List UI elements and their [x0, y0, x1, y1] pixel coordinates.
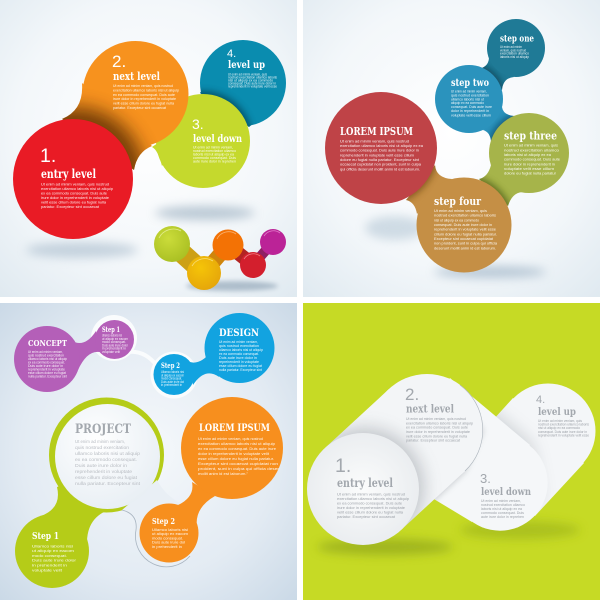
bubble 3: level down: level down — [193, 133, 242, 145]
capsule 1: entry level — [307, 433, 419, 545]
capsule 2: next level: irure dolor in reprehenderit in voluptate — [406, 430, 470, 434]
bubble: lorem ipsum orange and step 2: proident, sunt in culpa qui officia deser — [198, 467, 280, 471]
bubble: lorem ipsum orange and step 2: Step 2 — [152, 516, 175, 526]
bubble 1: entry level: Ut enim ad minim veniam, quis nostrud — [41, 182, 109, 186]
bubble: lorem ipsum red: LOREM IPSUM — [340, 124, 413, 138]
capsule 1: entry level: irure dolor in reprehenderit in voluptate — [337, 506, 405, 510]
bubble: project step 1 green: in prehenderit in — [32, 564, 67, 568]
bubble: design step 2: in prehenderit in — [161, 383, 182, 387]
bubble: lorem ipsum orange and step 2: Duis aute irure dol — [152, 541, 185, 545]
bubble: project step 1 green: Duis aute irure dolor — [32, 559, 77, 563]
bubble: concept step 1: Step 1 — [102, 325, 120, 334]
bubble 2: next level: exercitation ullamco laboris nisi ut aliquip — [113, 88, 179, 92]
bubble: step four — [406, 165, 512, 272]
bubble: step four: Ut enim ad minim veniam, quis — [434, 209, 487, 213]
bubble 2: next level: Ut enim ad minim veniam, quis nostrud — [113, 84, 173, 88]
capsule 3: level down: level down — [481, 486, 531, 498]
bubble: lorem ipsum red: dolore eu fugiat nulla pariatur. Excepteur sint — [340, 158, 419, 162]
capsule 4: level up — [496, 384, 596, 516]
bubble 3: level down: nostrud exercitation ullamco — [193, 149, 236, 153]
white ribbon between step 1 and step 2 — [128, 352, 157, 366]
capsule 2: next level: next level — [406, 402, 454, 416]
bubble: step three: voluptate velit esse cillum — [504, 167, 554, 171]
bubble: lorem ipsum red: commodo consequat. Duis aute irure dolor in — [340, 149, 419, 153]
icon: small coloured molecule — [154, 226, 286, 291]
bubble: project step 1 green: ut aliquip ex eacom — [32, 549, 74, 553]
capsule 4: level up: nisi ut aliquip ex ea commodo — [538, 426, 580, 430]
capsule 3: level down: 3. — [480, 471, 491, 486]
bubble: design step 2: ut aliquip ex eacom — [161, 373, 184, 377]
bubble 3: level down: laboris nisi ut aliquip ex ea — [193, 152, 234, 156]
bubble 3: level down — [152, 94, 250, 188]
bubble: lorem ipsum red: reprehenderit in voluptate velit esse cillum — [340, 153, 414, 157]
bubble: project white: Duis aute irure dolor in — [75, 463, 127, 469]
capsule 3: level down — [434, 378, 547, 531]
bubble: project step 1 green: voluptate velit — [32, 569, 62, 573]
panel: bottom-left background — [0, 303, 297, 600]
bubble: design step 2 — [154, 352, 219, 395]
bubble: step four: nostrud exercitation ullamco laboris — [434, 214, 496, 218]
capsule 4: level up: nostrud exercitation ullamco laboris — [538, 423, 589, 427]
bubble: design: nulla pariatur. Excepteur sint — [219, 368, 262, 372]
bubble 1: entry level: ex ea commodo consequat. Duis aute — [41, 192, 107, 196]
bubble: design: DESIGN — [219, 328, 259, 339]
bubble: design: ullamco laboris nisi ut aliquip — [219, 348, 263, 352]
bubble: project white: nulla pariatur. Excepteur sint — [75, 481, 141, 487]
bubble 3: level down: Ut enim ad minim veniam, — [193, 146, 233, 150]
bubble: step three: laboris nisi ut aliquip ex ea — [504, 153, 551, 157]
bubble: lorem ipsum orange and step 2: in prehenderit in — [152, 545, 182, 549]
capsule 3: level down: aute irure dolor in reprehen — [481, 515, 524, 519]
shadow under green bubble — [155, 206, 255, 220]
bubble: project white: ullamco laboris nisi ut aliquip — [75, 451, 140, 457]
bubble: design step 2: Step 2 — [161, 361, 180, 370]
bubble: step three: Ut enim ad minim veniam, quis — [504, 144, 558, 148]
bubble: step four: cillum dolore eu fugiat nulla pariatur. — [434, 232, 497, 236]
bubble: lorem ipsum orange and step 2: exercitation ullamco laboris nisi ut aliquip — [198, 442, 275, 446]
capsule 4: level up: 4. — [536, 394, 545, 406]
bubble: project white: esse cillum dolore eu fugiat — [75, 475, 138, 481]
ring: step 2 — [136, 504, 198, 566]
bubble: design step 2: modo consequat. — [161, 377, 182, 381]
white connector from project to step 2 — [122, 480, 180, 535]
bubble 1: entry level: pariatur. Excepteur sint occaecat — [41, 205, 99, 209]
bubble: step three: commodo consequat. Duis aute — [504, 158, 560, 162]
bubble: step three: dolore eu fugiat nulla pariatur — [504, 172, 557, 176]
shadow under capsules — [317, 539, 453, 555]
bubble: step two — [435, 65, 514, 141]
capsule 2: next level: exercitation ullamco laboris nisi ut aliquip — [406, 421, 473, 425]
diagram: concept to design chain — [14, 313, 274, 398]
bubble: lorem ipsum red: Ut enim ad minim veniam, quis nostrud — [340, 140, 409, 144]
bubble: concept: Ut enim ad minim veniam, — [28, 350, 63, 354]
capsule 1: entry level: entry level — [337, 476, 393, 490]
shadow behind lorem bubble — [365, 216, 425, 240]
bubble: step one: laboris nisi ut aliquip — [500, 55, 529, 59]
ring: step 1 — [91, 315, 137, 361]
capsule 2: next level — [325, 374, 483, 530]
bubble: concept: nulla pariatur. Excepteur sint — [28, 374, 67, 378]
bubble: step one: veniam, quis nostrud — [500, 48, 526, 52]
bubble: concept step 1: in prehenderit in — [102, 347, 126, 351]
capsule 1: entry level: velit esse cillum dolore eu fugiat nulla — [337, 510, 403, 514]
capsule 3: level down: commodo consequat. Duis — [481, 511, 524, 515]
bubble: project white: PROJECT — [75, 422, 131, 437]
bubble: concept: esse cillum dolore eu fugiat — [28, 371, 66, 375]
bubble: project step 1 green: modo consequat. — [32, 554, 67, 558]
shadow under step four — [434, 266, 546, 278]
bubble: step one: exercitation ullamco — [500, 52, 529, 56]
bubble: project white: reprehenderit in voluptate — [75, 469, 132, 475]
bubble 3: level down: commodo consequat. Duis — [193, 156, 236, 160]
bubble: lorem ipsum orange and step 2: ut aliquip ex eacom — [152, 532, 188, 536]
capsule 4: level up: level up — [538, 407, 576, 418]
ring edge: step 2 — [122, 510, 190, 567]
bubble 4: level up: consequat. Duis aute irure dolor in — [228, 82, 276, 86]
bubble: design: esse cillum dolore eu fugiat — [219, 364, 262, 368]
bubble: design: ex ea commodo consequat. — [219, 352, 259, 356]
capsule 2: next level: Ut enim ad minim veniam, quis nostrud — [406, 417, 466, 421]
capsule 2: next level: pariatur. Excepteur sint occaecat — [406, 439, 460, 443]
capsule 1: entry level: pariatur. Excepteur sint occaecat — [337, 515, 395, 519]
bubble: concept — [14, 326, 100, 392]
bubble: lorem ipsum red — [325, 92, 437, 204]
capsule 1: entry level: 1. — [335, 455, 351, 477]
bubble: step three: step three — [504, 128, 557, 142]
bubble: lorem ipsum orange and step 2: mollit anim id est laborum." — [198, 472, 249, 476]
bubble: concept step 1: modo consequat. — [102, 340, 126, 344]
capsule 4: level up: reprehenderit in voluptate velit esse — [538, 434, 589, 438]
capsule 1: entry level: ex ea commodo consequat. Duis aute — [337, 502, 402, 506]
bubble: concept step 1: Ullamco laboris nisi — [102, 334, 122, 338]
bubble 2: next level — [62, 41, 188, 170]
bubble: lorem ipsum orange and step 2: Excepteur sint occaecat cupidatat non — [198, 462, 278, 466]
bubble 3: level down: 3. — [192, 116, 204, 132]
bubble: step two: step two — [451, 77, 489, 89]
bubble: project step 1 green — [15, 398, 164, 588]
bubble: step two: aliquip ex ea commodo — [451, 101, 484, 105]
bubble: concept: reprehenderit in voluptate — [28, 368, 65, 372]
bubble: step one — [482, 19, 545, 90]
shadow under right capsules — [460, 521, 580, 539]
bubble 2: next level: velit esse cillum dolore eu fugiat nulla — [113, 102, 174, 106]
bubble 1: entry level: velit esse cillum dolore eu fugiat nulla — [41, 200, 106, 204]
bubble: step four: deserunt mollit anim id est laborum. — [434, 246, 496, 250]
capsule 2: next level: 2. — [405, 385, 419, 404]
capsule 3: level down: Ut enim ad minim veniam, — [481, 499, 521, 503]
bubble: concept step 1: ut aliquip ex eacom — [102, 337, 128, 341]
bubble: lorem ipsum orange and step 2: Ullamco laboris nisi — [152, 528, 188, 532]
bubble: lorem ipsum orange and step 2: dolor in reprehenderit in voluptate velit — [198, 452, 269, 456]
bubble 4: level up: reprehenderit in voluptate velit esse — [228, 84, 277, 88]
bubble 4: level up: Ut enim ad minim veniam, quis — [228, 72, 267, 76]
bubble 1: entry level: entry level — [41, 167, 96, 181]
shadow under red bubble — [26, 242, 138, 258]
bubble 2: next level: next level — [113, 70, 160, 83]
bubble: step two: voluptate velit esse cillum — [451, 114, 491, 118]
capsule 4: level up: Ut enim ad minim veniam, quis — [538, 419, 582, 423]
bubble: concept step 1 — [95, 320, 134, 359]
capsule 1: entry level: Ut enim ad minim veniam, quis nostrud — [337, 492, 405, 496]
bubble 4: level up: level up — [228, 59, 265, 71]
panel: bottom-right green background — [303, 303, 600, 600]
bubble: project white: quis nostrud exercitation — [75, 445, 129, 451]
bubble: concept: Duis aute irure dolor in — [28, 364, 63, 368]
bubble: step four: reprehenderit in voluptate velit esse — [434, 228, 496, 232]
panel: top-left background — [0, 0, 297, 297]
diagram: four level bubbles — [5, 40, 286, 258]
bubble: lorem ipsum orange and step 2: Ut enim ad minim veniam, quis nostrud — [198, 437, 263, 441]
bubble: concept: CONCEPT — [28, 339, 68, 349]
bubble: project step 1 green: Step 1 — [32, 532, 59, 542]
capsule 2: next level: ex ea commodo consequat. Duis aute — [406, 426, 468, 430]
bubble: step four: non proident, sunt in culpa qui officia — [434, 242, 497, 246]
diagram: step bubbles — [323, 19, 571, 278]
capsule 3: level down: laboris nisi ut aliquip ex ea — [481, 507, 522, 511]
bubble: step three: nostrud exercitation ullamco — [504, 148, 559, 152]
bubble: lorem ipsum orange and step 2: ex ea commodo consequat. Duis aute irure — [198, 447, 276, 451]
bubble: design: Duis aute irure dolor in — [219, 356, 257, 360]
bubble: design: Ut enim ad minim veniam, — [219, 340, 258, 344]
bubble: lorem ipsum orange and step 2: LOREM IPSUM — [199, 422, 270, 434]
bubble 2: next level: irure dolor in reprehenderit in voluptate — [113, 97, 176, 101]
bubble: step two: consequat. Duis aute irure — [451, 105, 492, 109]
ring: step 2 — [150, 352, 198, 398]
bubble 4: level up: nisi ut aliquip ex ea commodo — [228, 78, 273, 82]
bubble: step four: consequat. Duis aute irure dolor in — [434, 223, 492, 227]
capsule 2: next level: velit esse cillum dolore eu fugiat nulla — [406, 434, 467, 438]
bubble: lorem ipsum orange and step 2 — [140, 397, 283, 562]
panel: top-right background — [303, 0, 600, 297]
bubble: step four: nisi ut aliquip ex ea commodo — [434, 218, 479, 222]
bubble: lorem ipsum red: exercitation ullamco laboris nisi ut aliquip ex ea — [340, 144, 423, 148]
bubble: project white: Ut enim ad minim veniam, — [75, 439, 125, 445]
bubble 1: entry level — [13, 119, 133, 239]
bubble: step two: dolor in reprehenderit in — [451, 109, 489, 113]
bubble 2: next level: ex ea commodo consequat. Duis aute — [113, 93, 175, 97]
bubble: lorem ipsum orange and step 2: esse cillum dolore eu fugiat nulla pariatur. — [198, 457, 274, 461]
bubble 1: entry level: exercitation ullamco laboris nisi ut aliquip — [41, 187, 113, 191]
bubble: step one: step one — [500, 34, 534, 44]
capsule 4: level up: consequat. Duis aute irure dolor in — [538, 430, 587, 434]
bubble 1: entry level: 1. — [40, 145, 56, 167]
bubble: concept step 1: voluptate velit — [102, 350, 120, 354]
bubble: lorem ipsum red: qui officia deserunt mollit anim id est laborum. — [340, 167, 420, 171]
bubble: concept step 1: Duis aute irure dolor — [102, 343, 129, 347]
bubble 4: level up: nostrud exercitation ullamco laboris — [228, 76, 277, 80]
bubble: step two: ullamco laboris nisi ut — [451, 97, 484, 101]
bubble 4: level up: 4. — [227, 48, 236, 60]
bubble: concept: ullamco laboris nisi ut aliquip — [28, 357, 67, 361]
bubble: design: reprehenderit in voluptate — [219, 360, 259, 364]
diagram: white folded paper capsules — [307, 374, 596, 555]
bubble: concept: ex ea commodo consequat. — [28, 360, 65, 364]
bubble: step two: quis nostrud exercitation — [451, 93, 489, 97]
bubble: lorem ipsum orange and step 2: modo consequat. — [152, 536, 183, 540]
bubble: design step 2: Ullamco laboris nisi — [161, 370, 184, 374]
bubble 3: level down: aute irure dolor in reprehen — [193, 160, 236, 164]
bubble 2: next level: 2. — [112, 52, 126, 71]
bubble: step two: Ut enim ad minim veniam, — [451, 90, 487, 94]
bubble: step three: irure dolor in reprehenderit in — [504, 162, 555, 166]
bubble: lorem ipsum red: occaecat cupidatat non proident, sunt in culpa — [340, 163, 421, 167]
bubble: project step 1 green: Ullamco laboris nisi — [32, 544, 73, 548]
bubble: step one: Ut enim ad minim — [500, 45, 522, 49]
bubble: project white: ex ea commodo consequat. — [75, 457, 137, 463]
bubble: step four: step four — [434, 194, 482, 208]
bubble: design — [204, 313, 274, 383]
bubble: concept: quis nostrud exercitation — [28, 354, 64, 358]
bubble: design: quis nostrud exercitation — [219, 344, 259, 348]
bubble: project white — [55, 404, 160, 509]
bubble: step four: Excepteur sint occaecat cupidatat — [434, 237, 493, 241]
bubble 4: level up — [200, 40, 286, 127]
bubble 2: next level: pariatur. Excepteur sint occaecat — [113, 106, 166, 110]
bubble 1: entry level: irure dolor in reprehenderit in voluptate — [41, 196, 109, 200]
capsule 1: entry level: exercitation ullamco laboris nisi ut aliquip — [337, 497, 409, 501]
diagram: project bubbles — [15, 397, 283, 588]
bubble: design step 2: Duis aute irure dol — [161, 380, 184, 384]
capsule 3: level down: nostrud exercitation ullamco — [481, 503, 525, 507]
bubble: step three — [479, 113, 569, 206]
